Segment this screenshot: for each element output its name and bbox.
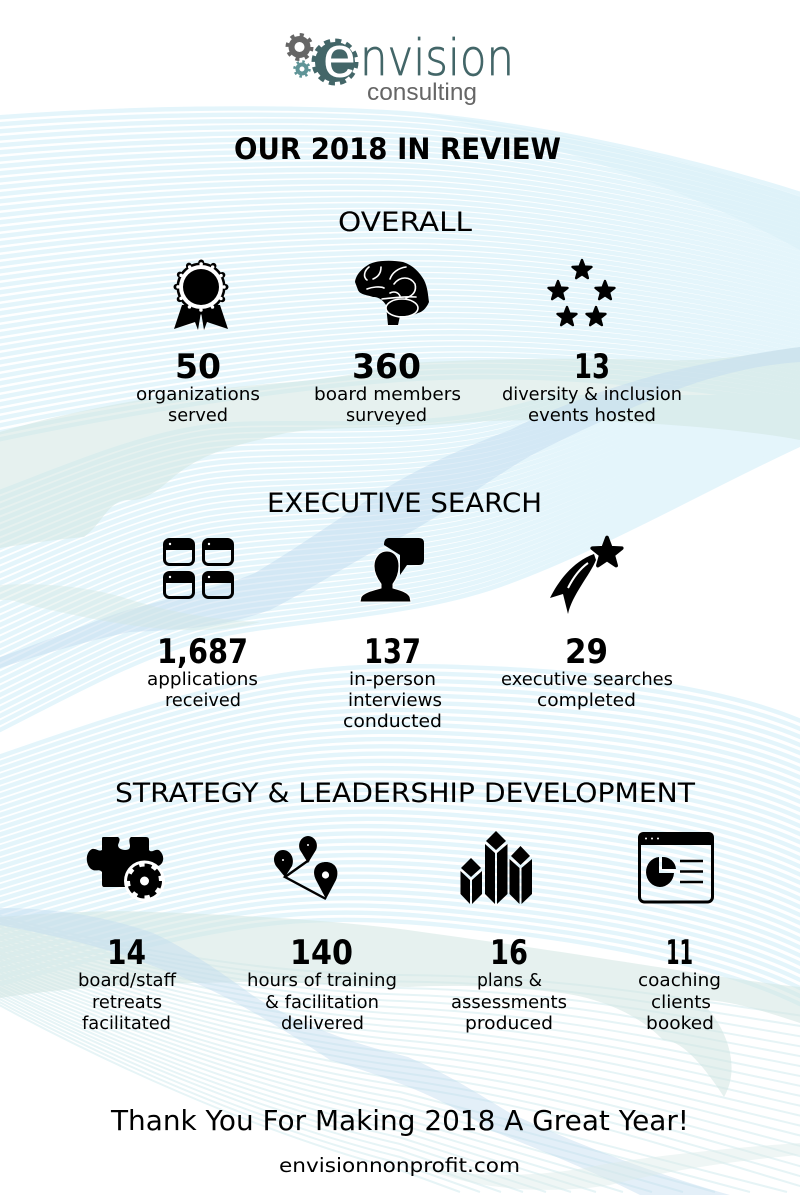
stat: 360 board members surveyed: board members	[314, 385, 461, 405]
stat: 140 hours of training and facilitation delivered: hours of training	[247, 971, 397, 991]
stat: 1,687 applications received: received	[165, 691, 241, 711]
stat: 14 board/staff retreats facilitated: board/staff	[78, 971, 177, 991]
title: OUR 2018 IN REVIEW	[234, 132, 561, 166]
stat: 13 diversity and inclusion events hosted: 13	[574, 347, 610, 386]
stat: 11 coaching clients booked: coaching	[638, 971, 721, 991]
stat: 29 executive searches completed: completed	[537, 691, 636, 711]
stat: 1,687 applications received: applications	[147, 670, 258, 690]
logo letter: e: e	[323, 25, 356, 90]
heading: overall: OVERALL	[338, 207, 472, 238]
heading: strategy and leadership development: STRATEGY & LEADERSHIP DEVELOPMENT	[115, 778, 696, 809]
stat: 140 hours of training and facilitation delivered	[247, 933, 397, 1034]
logo word: nvision: nvision	[360, 29, 514, 87]
stat: 140 hours of training and facilitation delivered: 140	[290, 933, 353, 972]
stat: 13 diversity and inclusion events hosted: diversity & inclusion	[502, 385, 682, 405]
icon: five stars	[548, 260, 615, 325]
stat: 137 in-person interviews conducted: interviews	[348, 691, 442, 711]
stat: 11 coaching clients booked	[638, 933, 721, 1034]
stat: 137 in-person interviews conducted: conducted	[343, 712, 442, 732]
stat: 137 in-person interviews conducted: in-person	[349, 670, 436, 690]
stat: 11 coaching clients booked: clients	[651, 993, 711, 1013]
stat: 14 board/staff retreats facilitated: retreats	[92, 993, 162, 1013]
stat: 1,687 applications received: 1,687	[157, 632, 248, 671]
stat: 360 board members surveyed: 360	[352, 347, 421, 386]
stat: 11 coaching clients booked: 11	[666, 933, 693, 972]
icon: map pins and route	[274, 836, 337, 899]
icon: isometric bar columns	[460, 831, 532, 904]
stat: 50 organizations served: organizations	[136, 385, 260, 405]
stat: 14 board/staff retreats facilitated: facilitated	[82, 1014, 171, 1034]
stat: 16 plans and assessments produced: plans &	[477, 971, 542, 991]
stat: 360 board members surveyed	[314, 347, 461, 426]
stat: 50 organizations served: served	[168, 406, 228, 426]
stat: 29 executive searches completed: executive searches	[501, 670, 673, 690]
website: envisionnonprofit.com	[279, 1154, 520, 1177]
icon: puzzle piece with gear	[87, 837, 165, 902]
icon: application windows	[164, 539, 233, 598]
section: overall	[136, 207, 682, 426]
icon: shooting star	[550, 538, 622, 614]
stat: 50 organizations served: 50	[175, 347, 221, 386]
stat: 16 plans and assessments produced	[451, 933, 567, 1034]
stat: 16 plans and assessments produced: 16	[490, 933, 528, 972]
logo: envision consulting	[288, 25, 514, 106]
section: executive search	[147, 488, 673, 732]
icon: award ribbon	[174, 262, 228, 330]
icon: small teal gear	[294, 62, 310, 76]
icon: gray gear	[288, 35, 312, 59]
stat: 14 board/staff retreats facilitated: 14	[107, 933, 146, 972]
stat: 140 hours of training and facilitation delivered: delivered	[281, 1014, 364, 1034]
stat: 13 diversity and inclusion events hosted: events hosted	[528, 406, 656, 426]
stat: 13 diversity and inclusion events hosted	[502, 347, 682, 426]
stat: 1,687 applications received	[147, 632, 258, 711]
section: strategy and leadership development	[78, 778, 721, 1034]
stat: 29 executive searches completed	[501, 632, 673, 711]
stat: 137 in-person interviews conducted	[343, 632, 442, 732]
stat: 360 board members surveyed: surveyed	[346, 406, 427, 426]
icon: person with speech bubble	[360, 538, 424, 602]
logo word: consulting: consulting	[367, 79, 477, 106]
stat: 11 coaching clients booked: booked	[646, 1014, 714, 1034]
icon: brain	[355, 261, 429, 325]
stat: 16 plans and assessments produced: produced	[465, 1014, 553, 1034]
stat: 50 organizations served	[136, 347, 260, 426]
stat: 137 in-person interviews conducted: 137	[364, 632, 421, 671]
stat: 16 plans and assessments produced: assessments	[451, 993, 567, 1013]
stat: 29 executive searches completed: 29	[565, 632, 608, 671]
icon: browser window with pie chart	[638, 832, 714, 902]
stat: 14 board/staff retreats facilitated	[78, 933, 177, 1034]
heading: executive search: EXECUTIVE SEARCH	[267, 488, 542, 519]
icon: large teal gear	[314, 41, 356, 83]
stat: 140 hours of training and facilitation delivered: & facilitation	[265, 993, 379, 1013]
closing message: Thank You For Making 2018 A Great Year!	[110, 1104, 689, 1137]
